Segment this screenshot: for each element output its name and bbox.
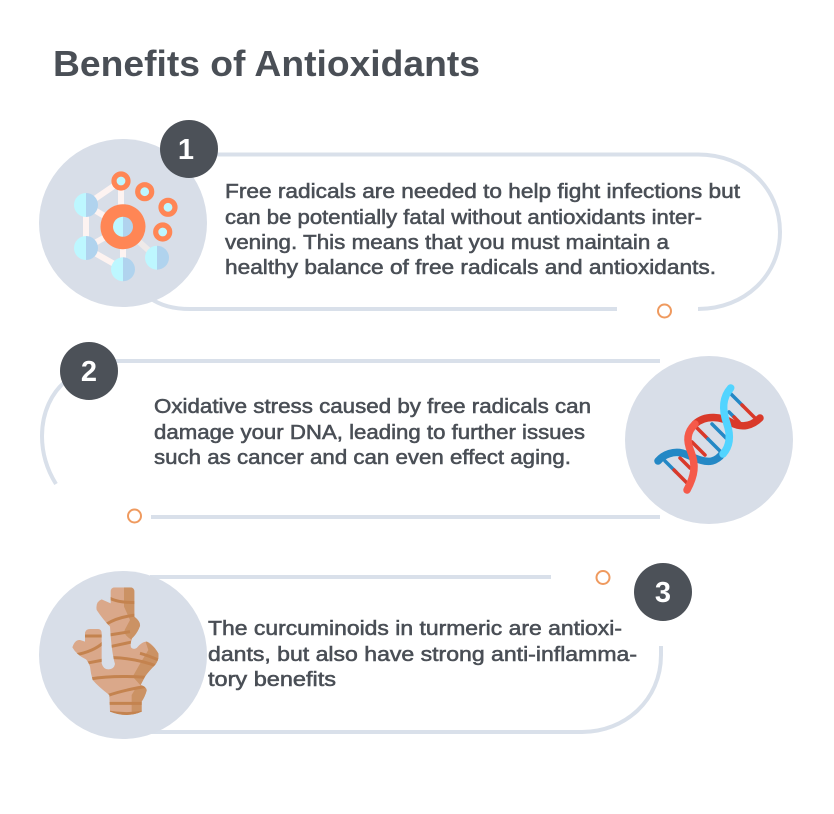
connector dot 3: [596, 571, 610, 584]
text block 1: healthy balance of free radicals and antioxidants.: [225, 257, 716, 279]
badge 1: [160, 120, 218, 178]
icon: DNA helix: [658, 388, 760, 490]
text block 2: damage your DNA, leading to further issues: [154, 422, 585, 444]
title: Benefits of Antioxidants: [53, 43, 480, 84]
icon: molecule: [74, 174, 175, 281]
text block 2: [154, 396, 591, 469]
badge 1: 1: [178, 134, 194, 166]
badge 3: [634, 563, 692, 621]
text block 1: [225, 181, 740, 279]
text block 3: dants, but also have strong anti-inflamma-: [208, 644, 637, 666]
panel outline 3: [150, 577, 661, 732]
badge 3: 3: [655, 577, 671, 609]
text block 3: tory benefits: [208, 669, 336, 691]
connector dot 1: [658, 304, 671, 318]
icon circle 1: [39, 139, 207, 307]
text block 3: The curcuminoids in turmeric are antioxi-: [208, 618, 622, 640]
icon circle 3: [39, 571, 207, 739]
panel: oxidative stress: [42, 342, 793, 524]
text block 1: vening. This means that you must maintain a: [225, 232, 670, 254]
panel: turmeric: [39, 563, 692, 739]
text block 2: Oxidative stress caused by free radicals can: [154, 396, 591, 418]
text block 2: such as cancer and can even effect aging.: [154, 447, 571, 469]
badge 2: [60, 342, 118, 400]
icon circle 2: [625, 356, 793, 524]
text block 1: Free radicals are needed to help fight infections but: [225, 181, 740, 203]
panel outline 2: [42, 361, 660, 517]
panel outline 1: [150, 154, 780, 309]
badge 2: 2: [81, 356, 97, 388]
connector dot 2: [128, 510, 141, 522]
icon: turmeric root: [70, 585, 162, 718]
text block 3: [208, 618, 637, 691]
panel: free radicals: [39, 120, 780, 318]
text block 1: can be potentially fatal without antioxidants inter-: [225, 207, 702, 229]
